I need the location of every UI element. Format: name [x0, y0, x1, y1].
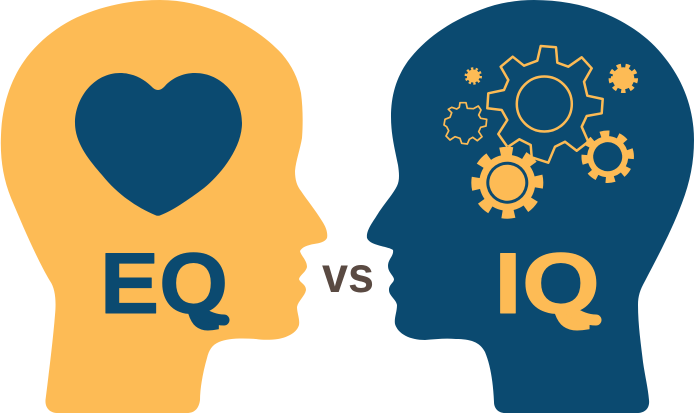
head silhouette: EQ — [1, 0, 327, 413]
head silhouette: IQ — [367, 0, 694, 413]
label: EQ: EQ — [100, 236, 228, 332]
icon: top right small gear — [611, 66, 636, 91]
icon: large outline gear — [487, 46, 603, 163]
panel: EQ head — [1, 0, 327, 413]
label: IQ: IQ — [494, 236, 600, 332]
panel: IQ head — [367, 0, 694, 413]
icon: bottom solid gear — [470, 146, 544, 220]
icon: heart — [75, 73, 242, 216]
icon: small outline gear — [444, 103, 487, 144]
icon: top left small gear — [466, 69, 480, 83]
label: vs: vs — [322, 247, 374, 303]
icon: gears — [444, 46, 636, 220]
icon: right ring gear — [580, 129, 636, 185]
